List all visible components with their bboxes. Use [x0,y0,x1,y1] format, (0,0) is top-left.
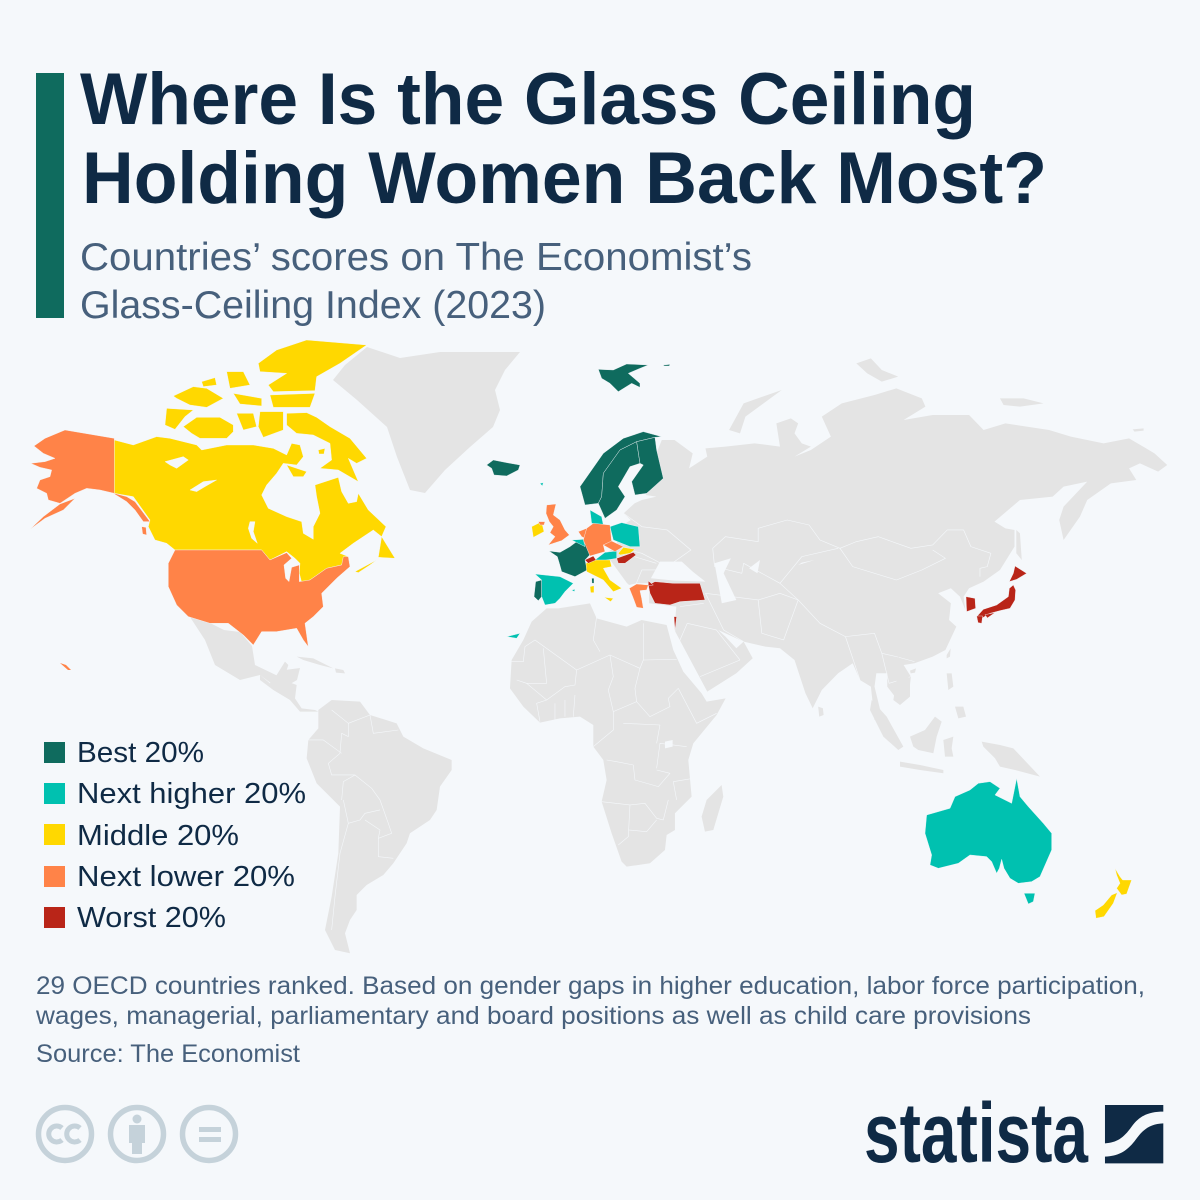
Novaya Zemlya [729,390,782,433]
worst 20% countries in Europe and Middle East [585,552,705,631]
United States [168,550,350,647]
seas and lakes [651,558,815,648]
Canadian lakes [165,457,257,543]
title [80,59,1047,219]
Africa [260,603,726,953]
legend item: best 20%: Best 20% [77,737,204,769]
South America [307,700,452,953]
Indonesia, Philippines, Taiwan, New Guinea [870,648,1040,777]
best 20% countries in Europe [487,364,670,601]
New Zealand [1095,868,1132,918]
creative commons icons [38,1108,236,1160]
legend item: next higher 20%: Next higher 20% [77,778,306,810]
footnote [35,972,1145,1030]
subtitle [80,236,752,327]
footnote: 29 OECD countries ranked. Based on gender gaps in higher education, labor force participation, [36,972,1145,1000]
subtitle: Countries’ scores on The Economist’s [80,236,752,279]
Australia [925,778,1052,904]
legend item: middle 20%: Middle 20% [77,820,239,852]
Sri Lanka [818,707,824,717]
Alaska [30,430,350,647]
source: Source: The Economist [36,1040,300,1068]
title accent bar [36,73,64,318]
Central America and Caribbean [260,662,318,712]
map: Europe and Middle East [487,364,705,638]
subtitle: Glass-Ceiling Index (2023) [80,284,546,327]
map: Japan, South Korea, Australia, New Zealand [925,566,1132,918]
Eurasia [605,358,1167,720]
next higher 20% countries in Europe [507,483,640,638]
title: Where Is the Glass Ceiling [80,59,976,140]
Asian borders [616,513,991,683]
Lake Victoria [665,740,673,748]
footnote: wages, managerial, parliamentary and board positions as well as child care provisions [35,1002,1031,1030]
title: Holding Women Back Most? [82,138,1047,219]
legend item: next lower 20%: Next lower 20% [77,861,295,893]
Greenland [333,347,520,493]
Sakhalin [1016,530,1022,560]
middle 20% countries in Europe [532,522,635,602]
African and South American borders [308,617,717,930]
legend item: worst 20%: Worst 20% [77,902,226,934]
map: North America, Alaska and contiguous United States [30,340,395,647]
Mexico [190,617,300,690]
next lower 20% countries in Europe [538,504,648,608]
map: grey land masses [190,347,1167,953]
icon: no derivatives equals [182,1108,236,1160]
icon: attribution person [110,1108,164,1160]
Canada [114,340,395,582]
Japan and South Korea [966,566,1027,623]
world map [30,340,1167,953]
map: Hawaii [60,663,71,670]
Statista wordmark: statista [864,1086,1089,1180]
icon: CC [38,1108,92,1160]
Severnaya Zemlya [856,358,898,382]
Madagascar [702,785,723,832]
legend [44,737,306,934]
Wrangel Island [1133,428,1144,432]
Statista logo mark [1105,1105,1163,1163]
New Siberian Islands [1000,398,1044,407]
